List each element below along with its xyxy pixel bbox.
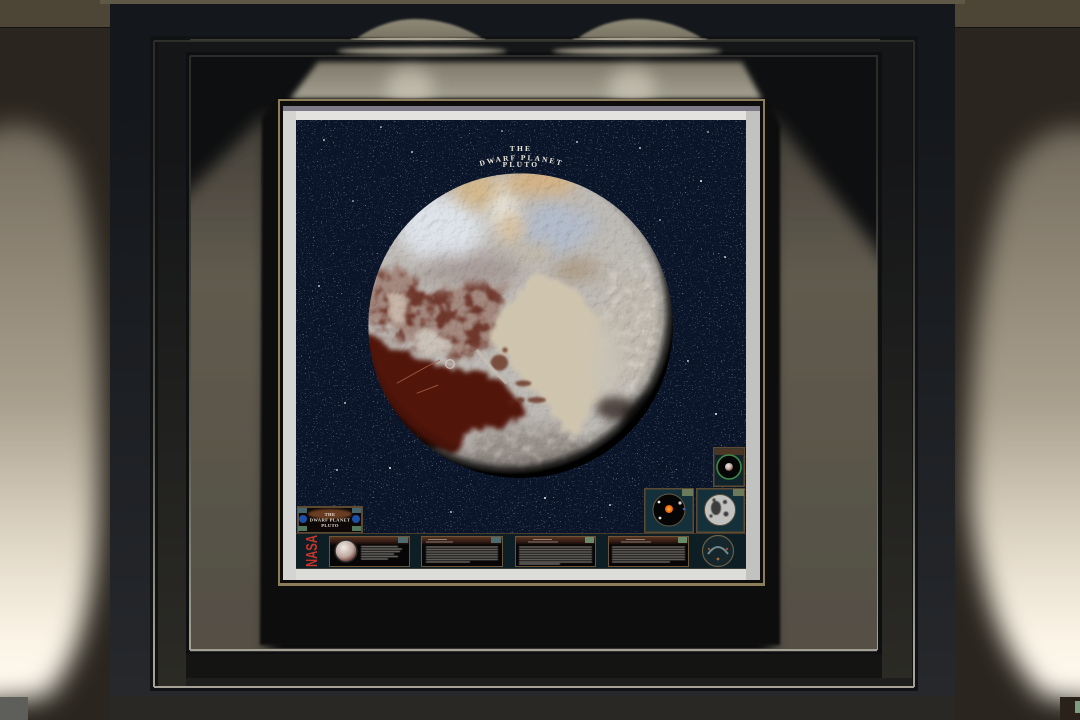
title: The Dwarf Planet Pluto: PLUTO	[503, 160, 539, 169]
right wall light fixture	[1060, 697, 1080, 720]
terminator shading	[367, 172, 674, 479]
right wall spotlight	[970, 128, 1080, 705]
star field	[296, 120, 746, 533]
panel 4: text card	[608, 536, 689, 567]
plaque text: DWARF PLANET	[310, 518, 350, 522]
gold frame	[278, 99, 765, 586]
poster cast shadow	[260, 99, 780, 645]
Pluto planet	[368, 173, 673, 478]
inner panel light above poster	[290, 62, 762, 108]
title: The Dwarf Planet Pluto	[479, 144, 562, 169]
mission badge	[702, 536, 734, 566]
panel 3: text card	[515, 536, 596, 567]
dark red Cthulhu region	[368, 330, 529, 456]
pale blue north cap	[394, 180, 597, 288]
eastern highlands	[462, 420, 588, 469]
NASA worm logo: NASA	[304, 535, 321, 567]
card: solar system	[644, 488, 694, 533]
red highlands on heart edge	[491, 347, 546, 403]
surface relief	[368, 174, 666, 463]
framed poster	[278, 99, 765, 586]
plaque text: THE	[325, 512, 335, 517]
southern shadowed terrain	[591, 390, 649, 426]
NASA badges	[298, 508, 361, 531]
eastern and southern pale mottling	[469, 262, 664, 468]
bright ridge and crater	[397, 350, 507, 393]
inner panel light, right of poster	[762, 117, 877, 649]
plaque: title card	[297, 506, 363, 533]
inner panel light, left of poster	[191, 112, 278, 649]
picture light arches	[190, 19, 880, 54]
panel 2: text card	[421, 536, 503, 567]
information strip	[296, 533, 746, 569]
title: The Dwarf Planet Pluto: THE	[510, 144, 532, 153]
card: surface map	[696, 488, 745, 533]
left wall light fixture	[0, 697, 28, 720]
mottled red western terrain	[360, 267, 507, 358]
panel 1: Pluto overview	[329, 536, 410, 567]
card: orbit of Pluto	[713, 447, 745, 487]
title: The Dwarf Planet Pluto: DWARF PLANET	[479, 155, 562, 166]
plaque text: PLUTO	[321, 523, 339, 528]
base surface	[368, 173, 673, 478]
moulding lines	[154, 41, 914, 687]
tan northern patches	[453, 165, 603, 281]
white mat	[283, 106, 760, 580]
plaque text	[310, 512, 350, 528]
left wall spotlight	[0, 125, 99, 705]
cream heart plain	[488, 272, 608, 440]
black liner	[280, 101, 763, 583]
